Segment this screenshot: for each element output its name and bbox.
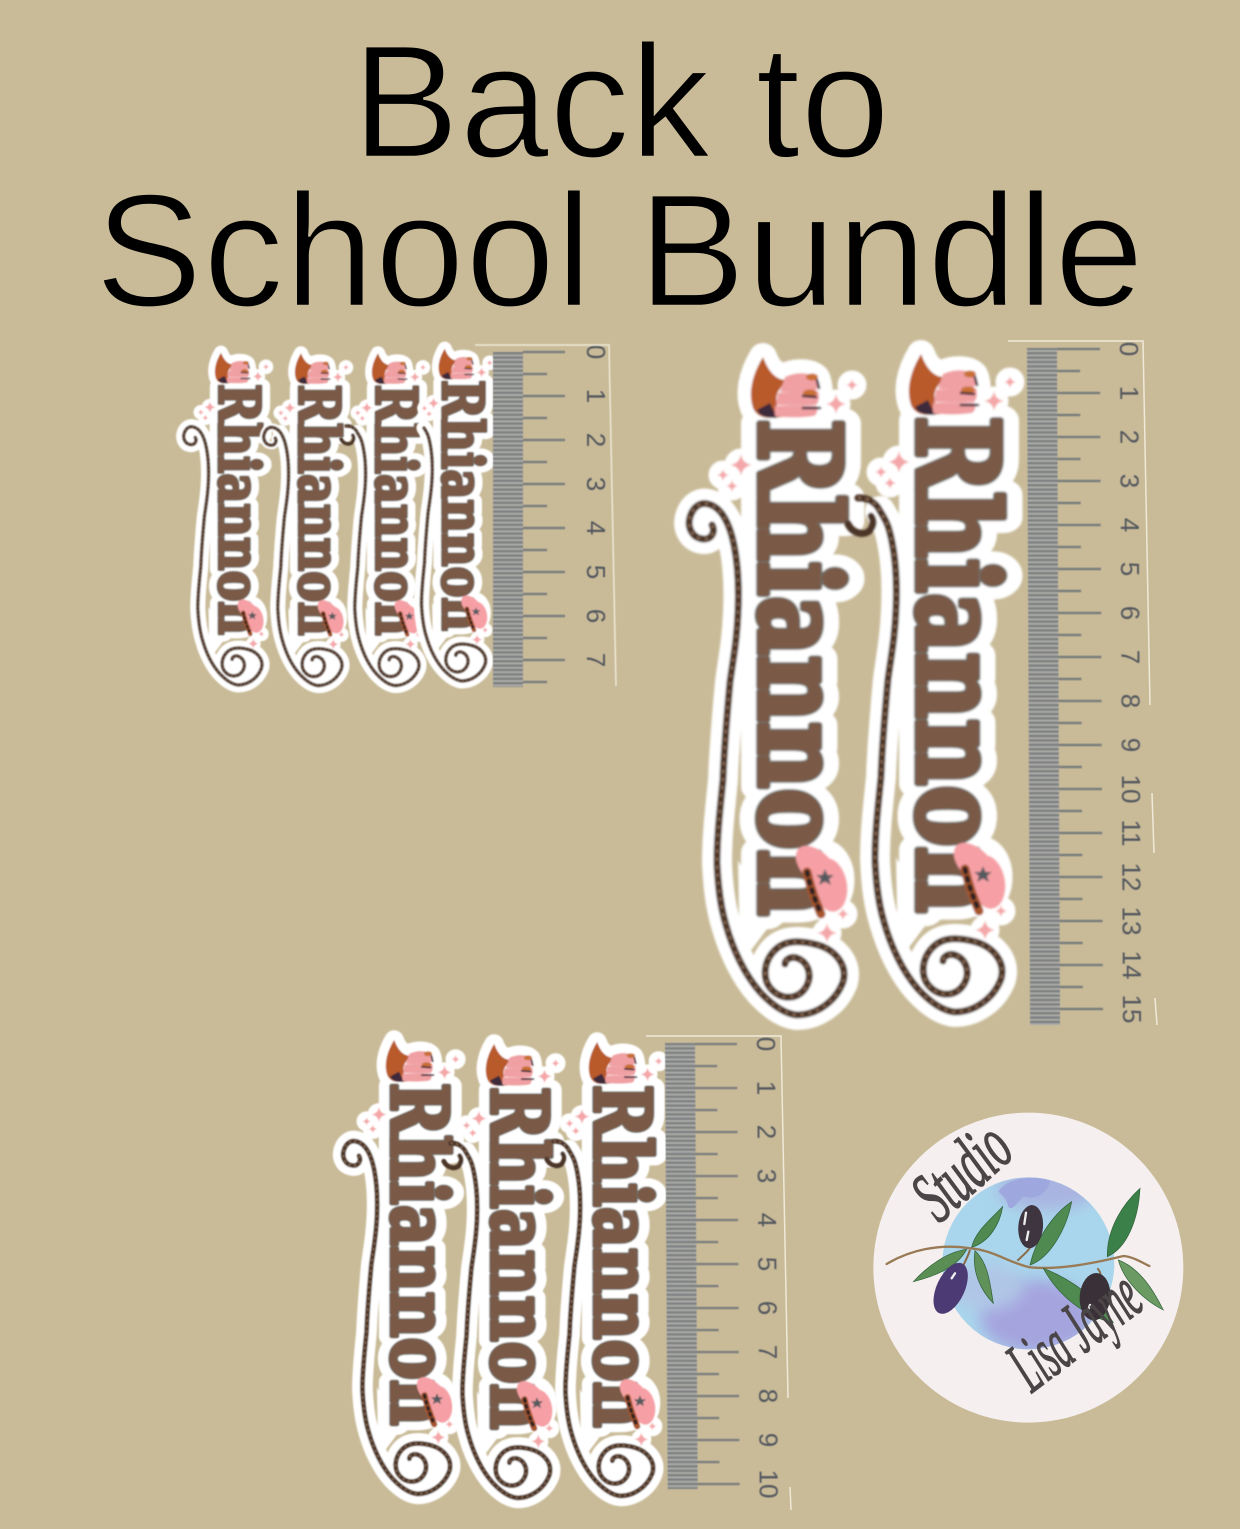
ruler: 0 to 15: 11: [1116, 820, 1146, 846]
ruler: 0 to 7: 5: [581, 565, 611, 579]
sticker: medium Rhiannon label 1: Rhiannon: [373, 1083, 464, 1426]
sticker: small Rhiannon label 1: Rhiannon: [205, 384, 271, 635]
title: [95, 12, 1144, 341]
sticker: medium Rhiannon label 1: Rhiannon: [373, 1083, 464, 1426]
ruler: 0 to 15: 5: [1115, 562, 1145, 576]
sticker: large Rhiannon label 2: Rhiannon: [891, 416, 1022, 913]
ruler: 0 to 15: 14: [1117, 951, 1147, 979]
ruler: 0 to 15: 7: [1115, 650, 1145, 664]
ruler: 0 to 10: [665, 1037, 784, 1498]
ruler: 0 to 10: 9: [753, 1433, 783, 1447]
ruler: 0 to 10: 7: [753, 1345, 783, 1359]
text: Lisa Jayne signature: Lisa Jayne: [991, 1254, 1156, 1407]
sticker: small Rhiannon label 1: Rhiannon: [205, 384, 271, 635]
text: Studio signature: Studio: [896, 1106, 1028, 1237]
sticker: large Rhiannon label 1: [689, 357, 866, 1015]
sticker: small Rhiannon label 1: [184, 353, 273, 685]
sticker: large Rhiannon label 2: [848, 354, 1024, 1012]
ruler: 0 to 15: 2: [1114, 430, 1144, 444]
sticker: small Rhiannon label 2: Rhiannon: [285, 385, 351, 636]
ruler: 0 to 10: 8: [753, 1389, 783, 1403]
sticker: medium Rhiannon label 1: [343, 1040, 465, 1494]
ruler: 0 to 10: 6: [753, 1301, 783, 1315]
panel: ten-inch pencil labels: [343, 1036, 791, 1510]
sticker: small Rhiannon label 4: Rhiannon: [429, 380, 495, 631]
ruler: 0 to 15: 12: [1116, 863, 1146, 891]
ruler: 0 to 7: 0: [581, 345, 611, 359]
sticker: medium Rhiannon label 2: Rhiannon: [473, 1087, 564, 1430]
icon: olive branch: [887, 1188, 1163, 1323]
sticker: large Rhiannon label 1: Rhiannon: [733, 419, 864, 916]
ruler: 0 to 15: 6: [1115, 606, 1145, 620]
sticker: small Rhiannon label 2: [264, 353, 353, 686]
icon: watercolor globe: [942, 1170, 1114, 1353]
sticker: medium Rhiannon label 2: Rhiannon: [473, 1087, 564, 1430]
ruler: 0 to 10: 2: [751, 1125, 782, 1139]
sticker: small Rhiannon label 1: Rhiannon: [205, 384, 271, 635]
sticker: small Rhiannon label 3: [341, 353, 430, 686]
sticker: medium Rhiannon label 3: [547, 1042, 668, 1496]
ruler: 0 to 10: 4: [752, 1213, 782, 1227]
sticker: medium Rhiannon label 3: Rhiannon: [576, 1085, 667, 1428]
logo: Studio Lisa Jayne badge: [873, 1106, 1183, 1423]
ruler: 0 to 15: 13: [1117, 907, 1147, 935]
sticker: small Rhiannon label 4: Rhiannon: [429, 380, 495, 631]
ruler: 0 to 15: 1: [1114, 386, 1144, 400]
title: School Bundle: [95, 161, 1144, 341]
ruler: 0 to 15: 3: [1115, 474, 1145, 488]
ruler: 0 to 7: 4: [581, 521, 611, 535]
sticker: large Rhiannon label 1: Rhiannon: [733, 419, 864, 916]
sticker: medium Rhiannon label 3: Rhiannon: [576, 1085, 667, 1428]
ruler: 0 to 10: 5: [752, 1257, 782, 1271]
title: Back to: [352, 12, 890, 192]
sticker: small Rhiannon label 3: Rhiannon: [362, 385, 428, 636]
ruler: 0 to 15: 9: [1116, 738, 1146, 752]
sticker: small Rhiannon label 4: Rhiannon: [429, 380, 495, 631]
ruler: 0 to 10: 10: [754, 1470, 784, 1498]
panel: seven-inch pencil labels: [184, 345, 616, 687]
ruler: 0 to 15: [1027, 342, 1147, 1025]
sticker: large Rhiannon label 1: Rhiannon: [733, 419, 864, 916]
sticker: medium Rhiannon label 1: Rhiannon: [373, 1083, 464, 1426]
sticker: large Rhiannon label 2: Rhiannon: [891, 416, 1022, 913]
ruler: 0 to 7: [475, 345, 616, 687]
sticker: large Rhiannon label 2: Rhiannon: [891, 416, 1022, 913]
sticker: small Rhiannon label 2: Rhiannon: [285, 385, 351, 636]
ruler: 0 to 7: 3: [581, 477, 611, 491]
sticker: small Rhiannon label 3: Rhiannon: [362, 385, 428, 636]
ruler: 0 to 15: 4: [1115, 518, 1145, 532]
ruler edge lines: [1008, 341, 1157, 1025]
ruler: 0 to 7: 2: [581, 433, 611, 447]
ruler: 0 to 15: 0: [1114, 342, 1144, 356]
sticker: medium Rhiannon label 2: Rhiannon: [473, 1087, 564, 1430]
ruler: 0 to 7: 1: [581, 389, 611, 403]
ruler: 0 to 15: 10: [1116, 775, 1146, 803]
sticker: small Rhiannon label 3: Rhiannon: [362, 385, 428, 636]
ruler: 0 to 7: 6: [581, 609, 611, 623]
sticker: small Rhiannon label 2: Rhiannon: [285, 385, 351, 636]
sticker: medium Rhiannon label 3: Rhiannon: [576, 1085, 667, 1428]
sticker: medium Rhiannon label 2: [444, 1044, 565, 1498]
ruler: 0 to 10: 0: [751, 1037, 781, 1051]
ruler: 0 to 10: 3: [752, 1169, 782, 1183]
ruler: 0 to 7: 7: [581, 653, 611, 667]
panel: fifteen-inch pencil labels: [689, 341, 1157, 1025]
ruler edge lines: [646, 1036, 791, 1510]
ruler: 0 to 15: 8: [1116, 694, 1146, 708]
ruler: 0 to 10: 1: [751, 1081, 781, 1095]
ruler: 0 to 15: 15: [1117, 995, 1147, 1023]
